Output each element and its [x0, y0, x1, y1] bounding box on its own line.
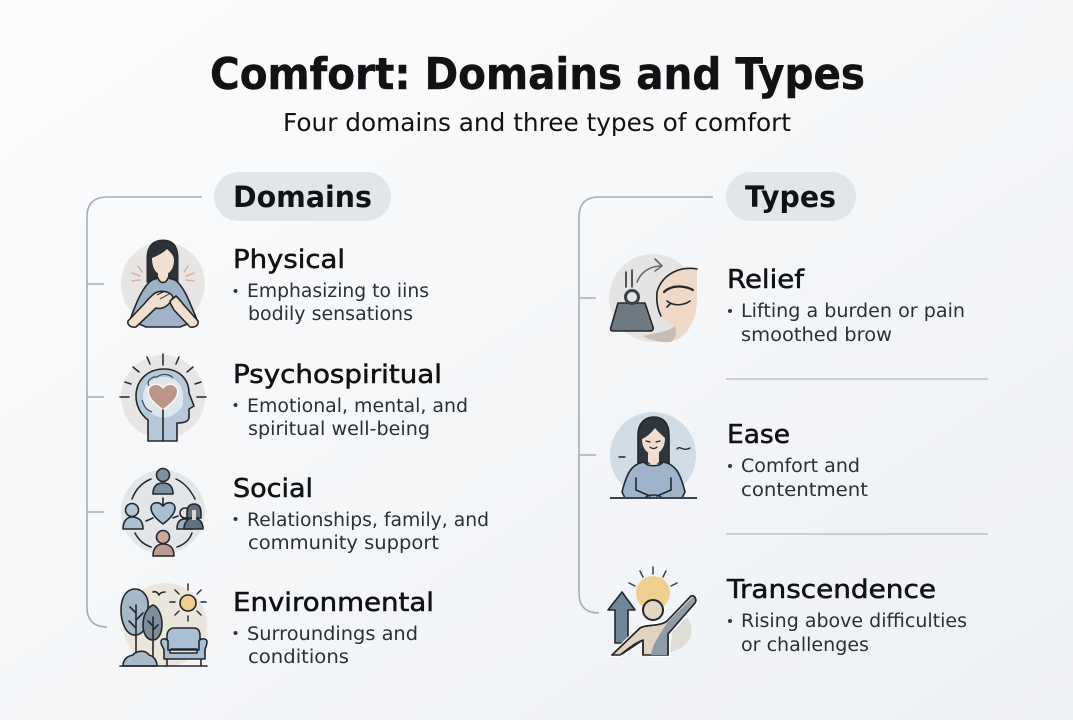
text: Environmental	[233, 588, 434, 668]
text: Physical: bodily sensations	[248, 304, 413, 325]
text: Ease: contentment	[741, 480, 868, 501]
icon: physical comfort, hands on chest	[121, 240, 205, 327]
text: Physical	[233, 245, 429, 325]
text: Psychospiritual: spiritual well-being	[248, 419, 430, 440]
text: Ease: Ease	[727, 420, 790, 450]
text: Social: Social	[233, 474, 313, 504]
text: Transcendence: Rising above difficulties	[741, 611, 967, 632]
domains bracket	[87, 197, 202, 627]
text: Environmental: Surroundings and	[247, 624, 418, 645]
text: Psychospiritual: Emotional, mental, and	[247, 396, 468, 417]
icon: environmental, trees, sun and armchair	[120, 583, 207, 667]
text: Transcendence: or challenges	[741, 635, 869, 656]
text: Ease	[727, 420, 868, 501]
divider line	[726, 378, 988, 380]
divider line	[726, 533, 988, 535]
subtitle: Four domains and three types of comfort	[283, 108, 791, 137]
text: Physical: Emphasizing to iins	[247, 281, 429, 302]
icon: social, connected people	[121, 468, 205, 556]
text: Environmental: conditions	[248, 647, 349, 668]
types bracket	[579, 197, 713, 613]
text: Relief	[727, 265, 965, 346]
text: Transcendence	[726, 575, 967, 656]
heading pill: Types	[726, 172, 856, 221]
heading pill: Domains	[214, 172, 391, 221]
title: Comfort: Domains and Types	[210, 49, 865, 100]
icon: ease, calm seated woman	[610, 412, 697, 498]
text: Social: Relationships, family, and	[247, 510, 489, 531]
heading pill: Domains: Domains	[233, 180, 372, 214]
text: Social	[233, 474, 489, 554]
icon: relief, weight lifted and calm face	[609, 254, 697, 342]
heading pill: Types: Types	[745, 180, 836, 214]
text: Relief: Lifting a burden or pain	[741, 301, 965, 322]
text: Relief: smoothed brow	[741, 325, 892, 346]
text: Psychospiritual	[233, 360, 468, 440]
icon: transcendence, rising figure with sun and arrow	[608, 567, 696, 655]
text: Physical: Physical	[233, 245, 345, 275]
text: Social: community support	[248, 533, 439, 554]
text: Ease: Comfort and	[741, 456, 860, 477]
text: Relief: Relief	[727, 265, 805, 295]
text: Environmental: Environmental	[233, 588, 434, 618]
text: Transcendence: Transcendence	[726, 575, 936, 605]
icon: psychospiritual, head with heart	[120, 354, 206, 441]
text: Psychospiritual: Psychospiritual	[233, 360, 442, 390]
